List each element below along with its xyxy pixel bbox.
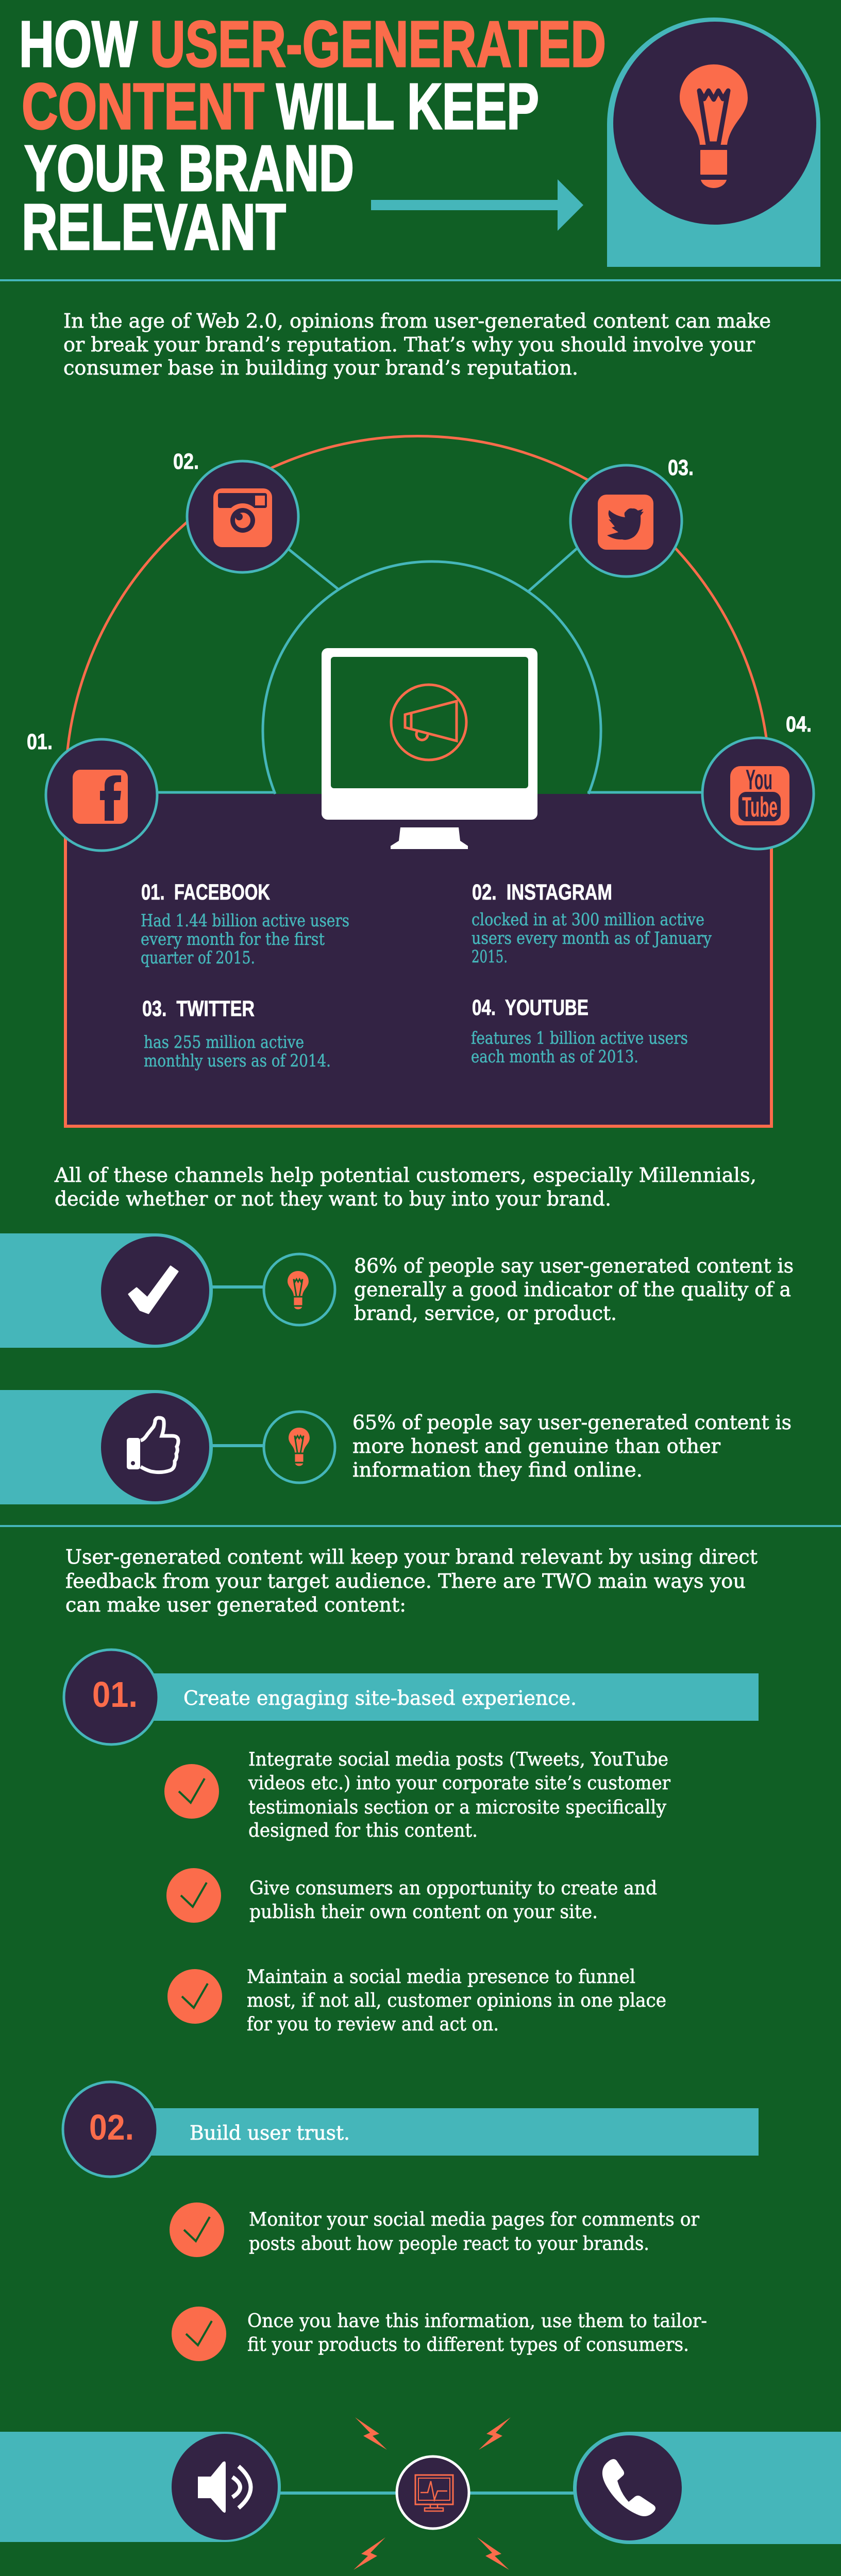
list item: social presence: most, if not all, customer opinions in one place <box>247 1990 666 2011</box>
icon: thumbs up <box>127 1418 178 1472</box>
channel: facebook stat: quarter of 2015. <box>141 947 255 968</box>
section intro text: feedback from your target audience. There are TWO main ways you <box>65 1570 746 1592</box>
stat text: 86% of people say user-generated content is <box>354 1255 794 1277</box>
stat text: information they find online. <box>352 1459 643 1481</box>
intro text: or break your brand’s reputation. That’s why you should involve your <box>63 333 755 356</box>
channels text: All of these channels help potential customers, especially Millennials, <box>54 1164 756 1187</box>
channel: youtube stat: 04. YOUTUBE <box>472 995 588 1020</box>
intro text: In the age of Web 2.0, opinions from user-generated content can make <box>63 310 771 332</box>
channel: instagram stat: users every month as of January <box>472 928 712 948</box>
section 02 header <box>63 2082 759 2177</box>
panel: channel stats <box>65 794 771 1126</box>
icon: small bulb <box>264 1412 335 1483</box>
title: CONTENT <box>22 70 264 143</box>
icon: small bulb <box>264 1254 335 1325</box>
list item: social presence: for you to review and act on. <box>247 2014 499 2035</box>
stat text: generally a good indicator of the quality of a <box>354 1278 791 1301</box>
list item: monitor pages: posts about how people react to your brands. <box>249 2233 649 2255</box>
icon: check <box>129 1266 178 1313</box>
title <box>19 8 606 263</box>
list item: social presence: Maintain a social media presence to funnel <box>247 1967 635 1988</box>
label: 03: 03. <box>668 455 694 480</box>
section 01 header <box>64 1650 759 1744</box>
list item: monitor pages <box>170 2202 700 2257</box>
section 02 header: Build user trust. <box>190 2122 350 2144</box>
channel: youtube stat: each month as of 2013. <box>471 1046 638 1066</box>
title: HOW <box>19 8 138 80</box>
title: RELEVANT <box>22 191 286 263</box>
icon: youtube: Tube <box>742 791 778 823</box>
list item: social presence <box>167 1967 666 2035</box>
channels text: decide whether or not they want to buy into your brand. <box>55 1188 611 1210</box>
stat text: more honest and genuine than other <box>352 1435 721 1458</box>
list item: monitor pages: Monitor your social media pages for comments or <box>249 2209 700 2230</box>
channel: youtube stat: features 1 billion active users <box>471 1028 688 1048</box>
channel: instagram stat: clocked in at 300 million active <box>472 909 704 929</box>
list item: tailor products <box>172 2307 707 2361</box>
icon: youtube <box>702 738 814 849</box>
channel: instagram stat: 2015. <box>472 946 508 967</box>
intro text <box>63 310 771 379</box>
feedback band <box>0 2417 841 2570</box>
icon: youtube: You <box>746 764 772 795</box>
channel: facebook stat <box>141 880 349 968</box>
label: 01: 01. <box>27 730 53 754</box>
title: WILL KEEP <box>276 70 539 143</box>
list item: tailor products: Once you have this information, use them to tailor- <box>247 2311 707 2332</box>
section 02 header: 02. <box>89 2107 134 2147</box>
diagram: social channels <box>27 436 814 1126</box>
channel: twitter stat: 03. TWITTER <box>142 996 255 1021</box>
stat text <box>352 1411 792 1481</box>
stat row: 86 percent <box>0 1233 794 1348</box>
section intro text: can make user generated content: <box>65 1594 406 1616</box>
list item: integrate posts: videos etc.) into your corporate site’s customer <box>248 1773 671 1794</box>
stat text <box>354 1255 794 1325</box>
icon: monitor with megaphone <box>322 648 537 849</box>
channel: facebook stat: Had 1.44 billion active users <box>141 910 349 930</box>
list item: integrate posts: testimonials section or a microsite specifically <box>248 1797 667 1818</box>
list item: tailor products: fit your products to different types of consumers. <box>247 2334 689 2355</box>
stat text: 65% of people say user-generated content is <box>352 1411 792 1434</box>
list item: integrate posts <box>164 1749 671 1841</box>
section 01 header: 01. <box>92 1674 138 1715</box>
icon: speaker <box>198 2462 250 2513</box>
section intro text: User-generated content will keep your brand relevant by using direct <box>65 1546 758 1568</box>
list item: create and publish <box>166 1868 657 1923</box>
icon: facebook <box>46 739 157 851</box>
list item: create and publish: Give consumers an opportunity to create and <box>249 1878 657 1899</box>
channel: twitter stat: monthly users as of 2014. <box>144 1050 331 1071</box>
icon: instagram <box>187 461 298 572</box>
stat row: 65 percent <box>0 1390 792 1504</box>
title: YOUR BRAND <box>24 132 354 205</box>
channel: instagram stat: 02. INSTAGRAM <box>472 880 612 905</box>
channel: twitter stat: has 255 million active <box>144 1032 304 1052</box>
arrow: to light bulb <box>371 179 583 231</box>
stat text: brand, service, or product. <box>354 1302 617 1325</box>
label: 04: 04. <box>786 712 812 737</box>
channels text <box>54 1164 756 1210</box>
intro text: consumer base in building your brand’s reputation. <box>63 357 578 379</box>
channel: facebook stat: 01. FACEBOOK <box>141 880 270 905</box>
icon: phone <box>602 2459 655 2516</box>
section 01 header: Create engaging site-based experience. <box>183 1687 577 1709</box>
icon: light bulb badge <box>607 18 820 267</box>
channel: youtube stat <box>471 995 688 1066</box>
icon: lightning bolts <box>354 2417 511 2570</box>
channel: twitter stat <box>142 996 331 1071</box>
channel: facebook stat: every month for the first <box>141 929 325 949</box>
section intro text <box>65 1546 758 1616</box>
title: USER-GENERATED <box>150 8 606 80</box>
list item: integrate posts: designed for this content. <box>248 1820 478 1841</box>
icon: central monitor <box>397 2456 469 2529</box>
channel: instagram stat <box>472 880 712 967</box>
icon: twitter <box>570 465 682 577</box>
label: 02: 02. <box>173 449 199 474</box>
list item: create and publish: publish their own content on your site. <box>249 1902 598 1923</box>
list item: integrate posts: Integrate social media posts (Tweets, YouTube <box>248 1749 668 1770</box>
